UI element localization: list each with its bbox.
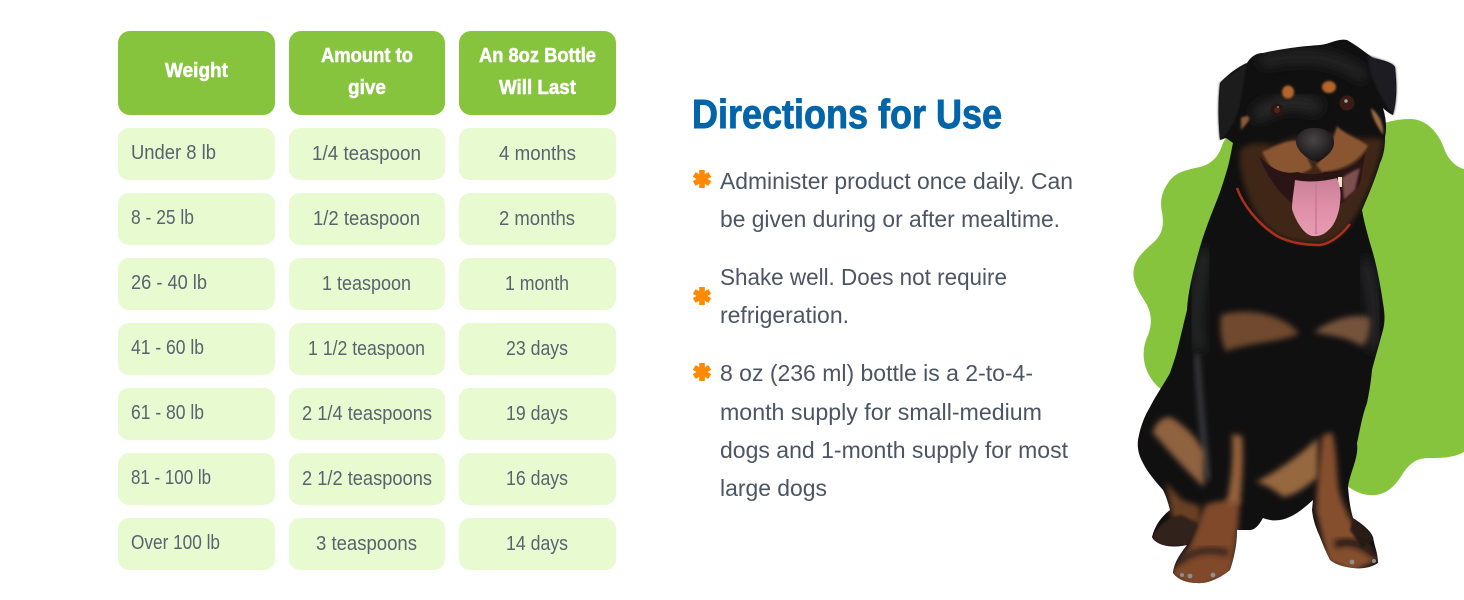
row: Over 100 lb: 3 teaspoons: [316, 533, 417, 555]
green blob background: [1133, 119, 1464, 495]
row: 41 - 60 lb: [118, 323, 616, 375]
list: directions: [694, 168, 1073, 501]
row: 26 - 40 lb: [118, 258, 616, 310]
red collar: [1237, 188, 1350, 245]
row: 26 - 40 lb: 1 month: [505, 273, 569, 295]
row: Over 100 lb: 14 days: [506, 533, 568, 555]
header: Amount to give: give: [348, 77, 386, 99]
hip tan: [1153, 417, 1204, 487]
row: 81 - 100 lb: [118, 453, 616, 505]
row: 61 - 80 lb: 2 1/4 teaspoons: [302, 403, 432, 425]
row: 26 - 40 lb: 1 teaspoon: [322, 273, 411, 295]
dog coat shading and tan markings: [1152, 57, 1383, 590]
row: 81 - 100 lb: 2 1/2 teaspoons: [302, 468, 432, 490]
front leg left lower: [1170, 500, 1240, 590]
row: 8 - 25 lb: [118, 193, 616, 245]
ears: [1218, 63, 1247, 140]
row: 8 - 25 lb: 1/2 teaspoon: [313, 208, 420, 230]
row: Under 8 lb: Under 8 lb: [131, 142, 216, 164]
row: 61 - 80 lb: 61 - 80 lb: [131, 402, 204, 424]
row: Over 100 lb: Over 100 lb: [131, 532, 220, 554]
row: 61 - 80 lb: [118, 388, 616, 440]
row: 8 - 25 lb: 2 months: [499, 208, 575, 230]
hind paws: [1152, 515, 1198, 546]
bullet 3: 8 oz (236 ml) bottle is a 2-to-4-: [720, 360, 1033, 386]
row: 81 - 100 lb: 81 - 100 lb: [131, 467, 211, 489]
icon: orange asterisk: [694, 170, 710, 188]
header: An 8oz Bottle Will Last: [459, 31, 616, 115]
row: 8 - 25 lb: 8 - 25 lb: [131, 207, 194, 229]
bullet 3: large dogs: [720, 475, 827, 501]
bullet 1: [694, 168, 1073, 232]
table: dosage by weight: [118, 31, 616, 570]
header: An 8oz Bottle Will Last: Will Last: [499, 77, 576, 99]
bullet 2: refrigeration.: [720, 302, 849, 328]
row: 26 - 40 lb: 26 - 40 lb: [131, 272, 207, 294]
row: 61 - 80 lb: 19 days: [506, 403, 568, 425]
row: Under 8 lb: [118, 128, 616, 180]
heading: Directions for Use: Directions for Use: [692, 91, 1002, 137]
front leg left tan stripe: [1226, 434, 1243, 504]
eyes: [1270, 96, 1354, 116]
brow markings: [1282, 81, 1336, 98]
bullet 3: dogs and 1-month supply for most: [720, 437, 1069, 463]
row: Over 100 lb: [118, 518, 616, 570]
side of neck tan: [1371, 108, 1383, 135]
illustration: sitting rottweiler: [1138, 40, 1396, 590]
nose: [1296, 128, 1334, 162]
front leg right: [1316, 432, 1378, 572]
header: Weight: Weight: [165, 60, 228, 82]
icon: orange asterisk: [694, 363, 710, 381]
bullet 1: be given during or after mealtime.: [720, 206, 1060, 232]
bullet 3: month supply for small-medium: [720, 399, 1042, 425]
chest tan: [1221, 312, 1299, 351]
bullet 3: [694, 360, 1069, 501]
header: Amount to give: Amount to: [321, 45, 413, 67]
belly tan: [1256, 438, 1318, 497]
icon: orange asterisk: [694, 287, 710, 305]
paw shading: [1178, 550, 1228, 563]
toe nails: [1180, 573, 1184, 577]
row: 41 - 60 lb: 23 days: [506, 338, 568, 360]
row: 41 - 60 lb: 41 - 60 lb: [131, 337, 204, 359]
bullet 2: [694, 264, 1007, 328]
row: 41 - 60 lb: 1 1/2 teaspoon: [308, 338, 425, 360]
bullet 2: Shake well. Does not require: [720, 264, 1007, 290]
header: Weight: [118, 31, 275, 115]
open mouth: [1259, 152, 1366, 204]
tongue: [1292, 178, 1341, 236]
dog body silhouette: [1138, 40, 1396, 583]
bullet 1: Administer product once daily. Can: [720, 168, 1073, 194]
row: 81 - 100 lb: 16 days: [506, 468, 568, 490]
muzzle, cheeks and jaw: [1240, 133, 1383, 243]
header: An 8oz Bottle Will Last: An 8oz Bottle: [479, 45, 596, 67]
header: Amount to give: [289, 31, 445, 115]
row: Under 8 lb: 4 months: [499, 143, 576, 165]
row: Under 8 lb: 1/4 teaspoon: [312, 143, 421, 165]
